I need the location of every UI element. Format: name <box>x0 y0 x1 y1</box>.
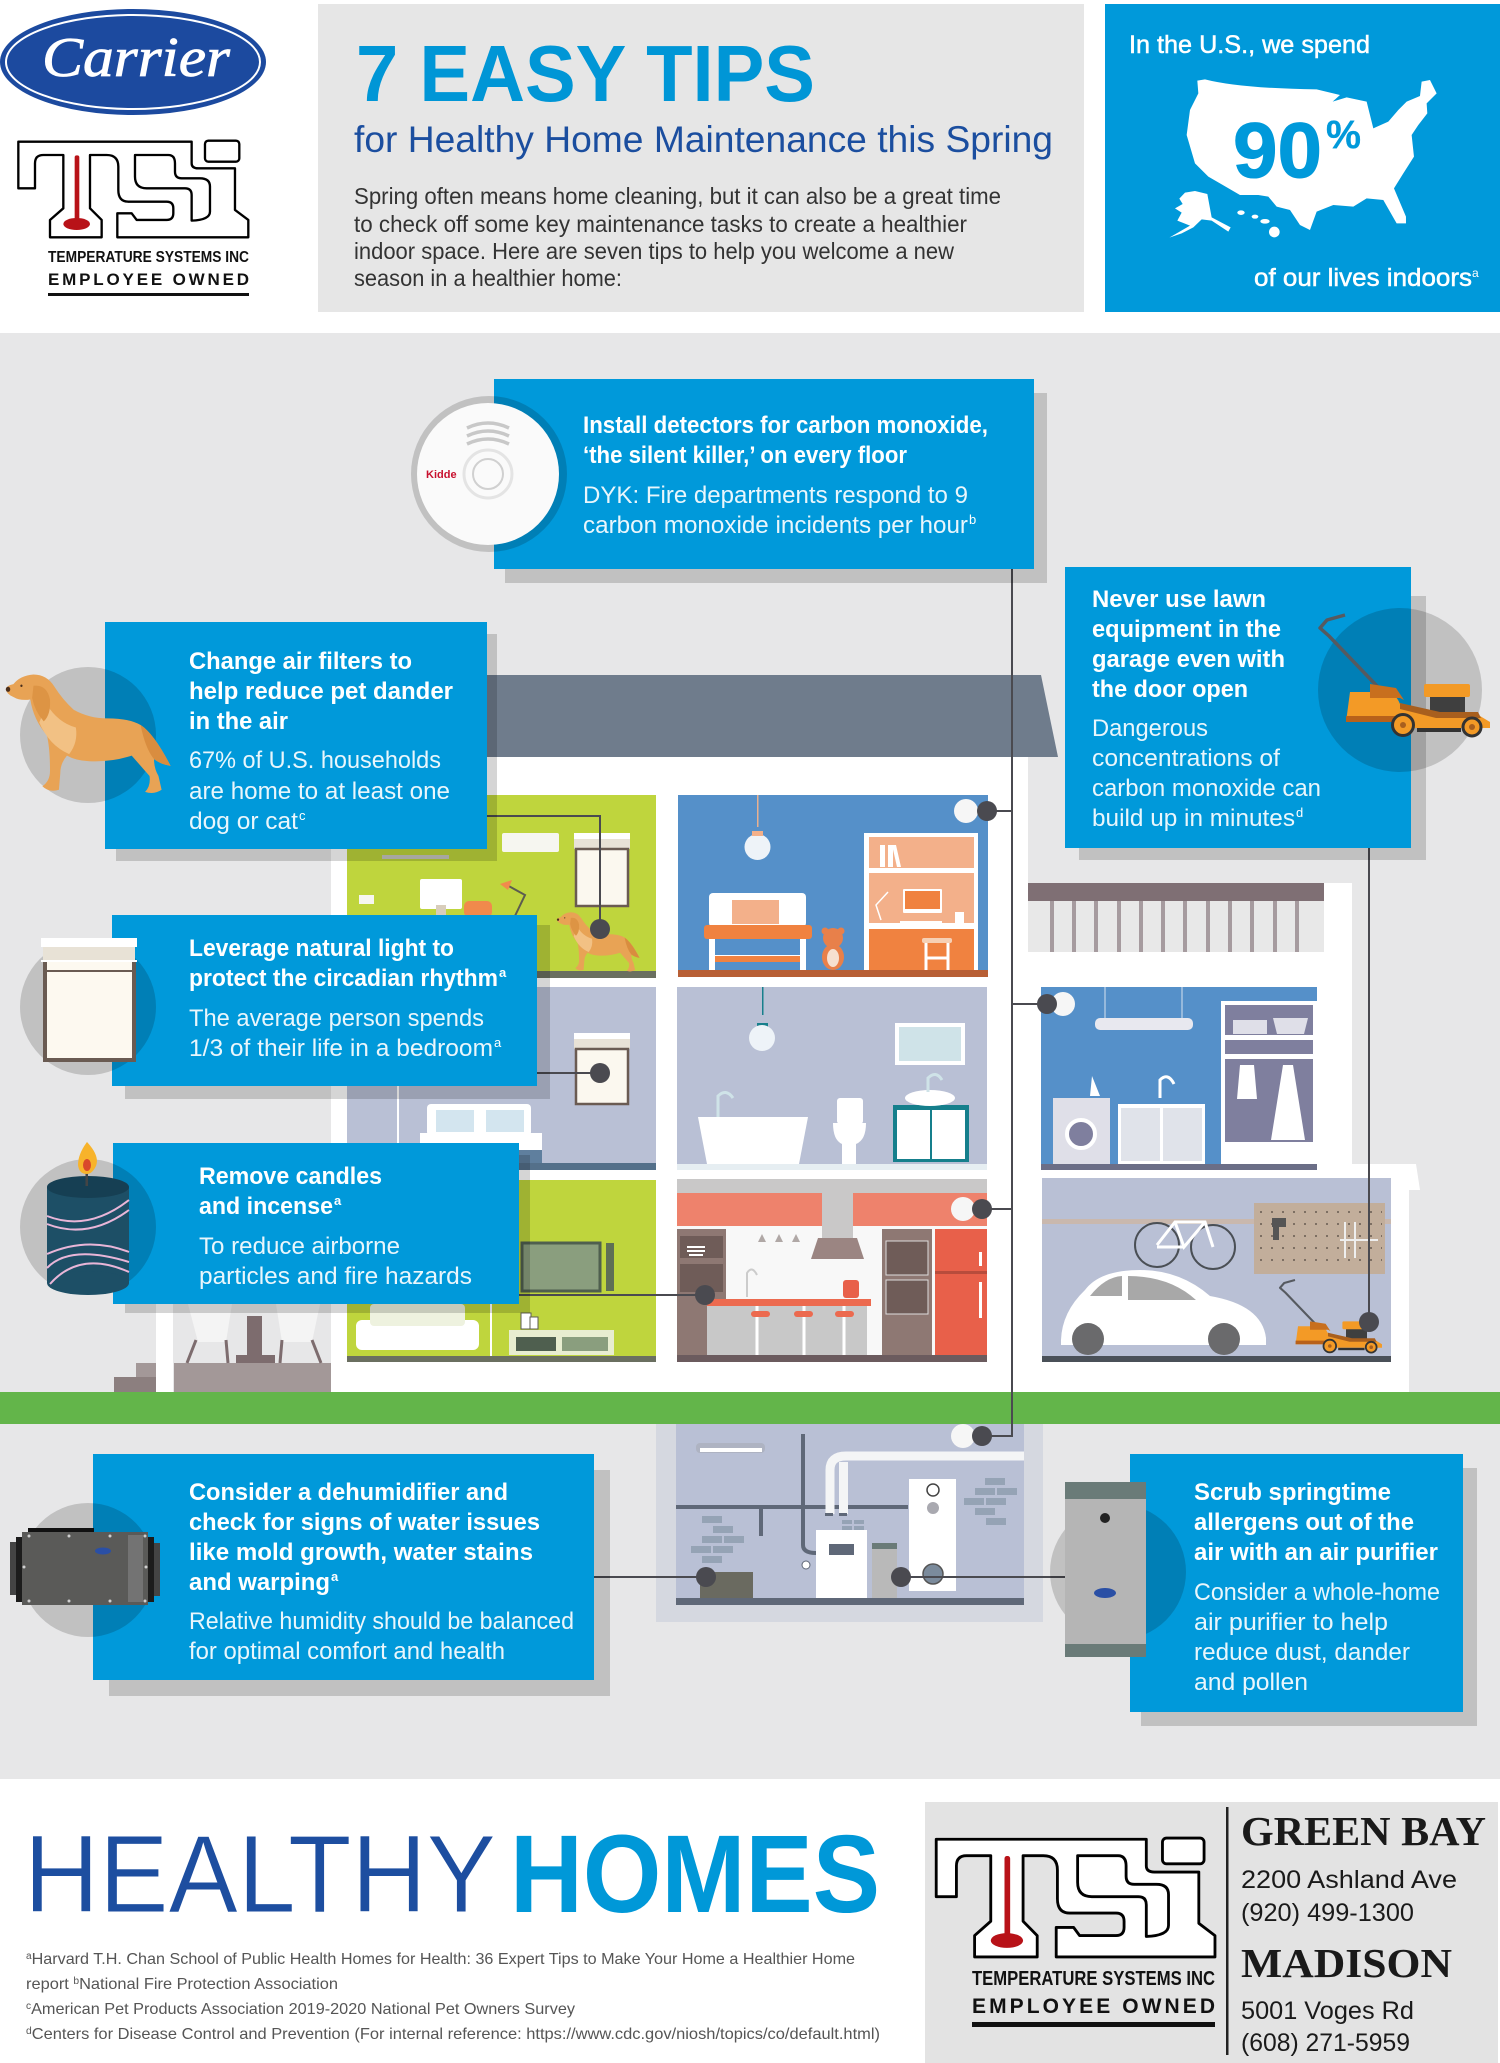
heading: air with an air purifier <box>1194 1539 1438 1566</box>
heading <box>189 1479 540 1596</box>
body text <box>199 1233 472 1290</box>
room: kids bedroom <box>678 795 988 977</box>
body text <box>189 1608 574 1665</box>
heading <box>583 412 988 469</box>
footnotes <box>26 1951 880 2043</box>
body text: a <box>494 1035 502 1050</box>
footnotes: b <box>73 1976 80 1987</box>
body text <box>583 482 976 539</box>
logo: TSI footer: TEMPERATURE SYSTEMS INC <box>972 1968 1215 1990</box>
heading: help reduce pet dander <box>189 678 453 705</box>
body text: carbon monoxide incidents per hour <box>583 512 968 539</box>
stat number: 90 <box>1233 106 1322 194</box>
logo: Carrier <box>0 9 266 115</box>
room: kitchen <box>677 1179 987 1362</box>
callout: air filters <box>6 622 497 861</box>
panel: 90% indoors stat <box>1105 4 1500 312</box>
body text: reduce dust, dander <box>1194 1639 1410 1666</box>
heading: Remove candles <box>199 1163 382 1190</box>
location: Madison <box>1241 1940 1452 2057</box>
subtitle: for Healthy Home Maintenance this Spring <box>354 119 1053 160</box>
room: basement <box>656 1424 1043 1622</box>
footer heading: Healthy Homes: HOMES <box>510 1813 880 1936</box>
footnotes: report <box>26 1976 68 1993</box>
footnotes: National Fire Protection Association <box>79 1976 338 1993</box>
intro text <box>354 183 1001 291</box>
callout: air purifier <box>1050 1454 1477 1726</box>
callout: carbon monoxide detectors <box>411 379 1047 583</box>
icon: candle <box>47 1142 129 1295</box>
body text: Consider a whole-home <box>1194 1579 1440 1606</box>
body text: c <box>299 808 306 823</box>
heading <box>1194 1479 1438 1566</box>
connector lines <box>487 569 1369 1577</box>
heading: a <box>334 1193 342 1208</box>
icon: dog <box>6 674 171 793</box>
logo: TSI Temperature Systems Inc: TEMPERATURE SYSTEMS INC <box>48 249 249 266</box>
stat label top: In the U.S., we spend <box>1129 31 1370 59</box>
heading: protect the circadian rhythm <box>189 965 498 992</box>
heading: allergens out of the <box>1194 1509 1414 1536</box>
room: bathroom <box>677 987 987 1170</box>
heading: Never use lawn <box>1092 586 1266 613</box>
icon: US map <box>1169 79 1437 238</box>
location: Madison: MADISON <box>1241 1940 1452 1986</box>
roof <box>360 675 1058 757</box>
logo: TSI footer: EMPLOYEE OWNED <box>972 1995 1215 2018</box>
icon: dehumidifier <box>10 1528 160 1605</box>
location: Green Bay: 2200 Ashland Ave <box>1241 1866 1457 1894</box>
location: Green Bay: GREEN BAY <box>1241 1808 1486 1854</box>
footer heading: Healthy Homes <box>24 1813 880 1936</box>
heading: the door open <box>1092 676 1248 703</box>
heading <box>1092 586 1285 703</box>
heading <box>189 935 507 992</box>
room: living room <box>347 1180 656 1362</box>
intro text: Spring often means home cleaning, but it can also be a great time <box>354 183 1001 209</box>
room: garage <box>1042 1178 1391 1362</box>
footnotes: d <box>26 2026 32 2037</box>
body text <box>1092 715 1321 832</box>
body text: DYK: Fire departments respond to 9 <box>583 482 968 509</box>
stat number <box>1233 106 1361 194</box>
stat number: % <box>1326 113 1361 157</box>
body text: 67% of U.S. households <box>189 747 441 774</box>
title: 7 EASY TIPS <box>356 29 815 118</box>
heading: ‘the silent killer,’ on every floor <box>583 442 907 469</box>
logo: TSI footer <box>936 1838 1215 2027</box>
heading: and incense <box>199 1193 333 1220</box>
callout: dehumidifier <box>10 1454 610 1696</box>
room: bedroom <box>347 987 656 1170</box>
icon: smoke detector: Kidde <box>426 469 457 481</box>
heading: in the air <box>189 708 288 735</box>
house body <box>331 757 1028 1392</box>
ground: green band <box>0 1392 1500 1424</box>
body text <box>189 747 450 835</box>
patio <box>114 1304 331 1392</box>
body text: concentrations of <box>1092 745 1280 772</box>
garage wing <box>1028 883 1420 1392</box>
body text: Relative humidity should be balanced <box>189 1608 574 1635</box>
heading: Change air filters to <box>189 648 412 675</box>
body text: dog or cat <box>189 808 298 835</box>
heading: Install detectors for carbon monoxide, <box>583 412 988 439</box>
body text: are home to at least one <box>189 778 450 805</box>
heading <box>189 648 453 735</box>
heading: check for signs of water issues <box>189 1509 540 1536</box>
intro text: to check off some key maintenance tasks to create a healthier <box>354 211 967 237</box>
room: home office <box>347 795 656 978</box>
body text: 1/3 of their life in a bedroom <box>189 1035 493 1062</box>
body text: d <box>1296 805 1303 820</box>
stat label bottom: of our lives indoors <box>1254 264 1472 292</box>
body text: and pollen <box>1194 1669 1308 1696</box>
illustration: house cutaway <box>0 675 1500 1622</box>
footnotes: American Pet Products Association 2019-2020 National Pet Owners Survey <box>31 2001 575 2018</box>
heading: like mold growth, water stains <box>189 1539 533 1566</box>
callout: natural light <box>20 915 550 1099</box>
intro text: indoor space. Here are seven tips to help you welcome a new <box>354 238 954 264</box>
body text: To reduce airborne <box>199 1233 400 1260</box>
footnotes: Harvard T.H. Chan School of Public Health Homes for Health: 36 Expert Tips to Make Your Home a Healthier Home <box>32 1951 855 1968</box>
heading: Leverage natural light to <box>189 935 454 962</box>
room: laundry <box>1041 987 1317 1170</box>
body text <box>189 1005 502 1062</box>
body text: for optimal comfort and health <box>189 1638 505 1665</box>
mini detectors <box>951 799 1075 1448</box>
heading: a <box>331 1569 339 1584</box>
body text: carbon monoxide can <box>1092 775 1321 802</box>
callout: candles and incense <box>20 1142 530 1313</box>
location: Madison: (608) 271-5959 <box>1241 2029 1410 2057</box>
footnotes: Centers for Disease Control and Prevention (For internal reference: https://www.cdc.gov/niosh/topics/co/default.html) <box>32 2026 880 2043</box>
heading: and warping <box>189 1569 330 1596</box>
heading: Consider a dehumidifier and <box>189 1479 508 1506</box>
location: Green Bay <box>1241 1808 1486 1927</box>
callout: lawn equipment <box>1065 567 1490 860</box>
icon: window <box>41 938 137 1062</box>
location: Madison: 5001 Voges Rd <box>1241 1997 1414 2025</box>
footer heading: Healthy Homes: HEALTHY <box>24 1813 496 1936</box>
body text: particles and fire hazards <box>199 1263 472 1290</box>
heading: Scrub springtime <box>1194 1479 1391 1506</box>
location: Green Bay: (920) 499-1300 <box>1241 1899 1414 1927</box>
panel: locations and logo <box>925 1802 1498 2063</box>
body text: Dangerous <box>1092 715 1208 742</box>
panel: main gray background <box>0 333 1500 1779</box>
logo: TSI Temperature Systems Inc <box>18 141 249 296</box>
body text: The average person spends <box>189 1005 484 1032</box>
body text <box>1194 1579 1440 1696</box>
icon: air purifier <box>1065 1482 1146 1657</box>
icon: smoke detector <box>417 403 559 545</box>
body text: build up in minutes <box>1092 805 1295 832</box>
footnotes: a <box>26 1951 32 1962</box>
panel: title header <box>318 4 1084 312</box>
logo: Carrier: Carrier <box>42 27 230 89</box>
heading: garage even with <box>1092 646 1285 673</box>
body text: b <box>969 512 976 527</box>
body text: air purifier to help <box>1194 1609 1388 1636</box>
stat label bottom: a <box>1472 266 1479 280</box>
icon: lawn mower <box>1320 615 1490 736</box>
heading: a <box>499 965 507 980</box>
connector nodes <box>590 801 1379 1587</box>
intro text: season in a healthier home: <box>354 265 622 291</box>
logo: TSI Temperature Systems Inc: EMPLOYEE OWNED <box>48 270 249 289</box>
heading: equipment in the <box>1092 616 1281 643</box>
footnotes: c <box>26 2001 31 2012</box>
heading <box>199 1163 382 1220</box>
